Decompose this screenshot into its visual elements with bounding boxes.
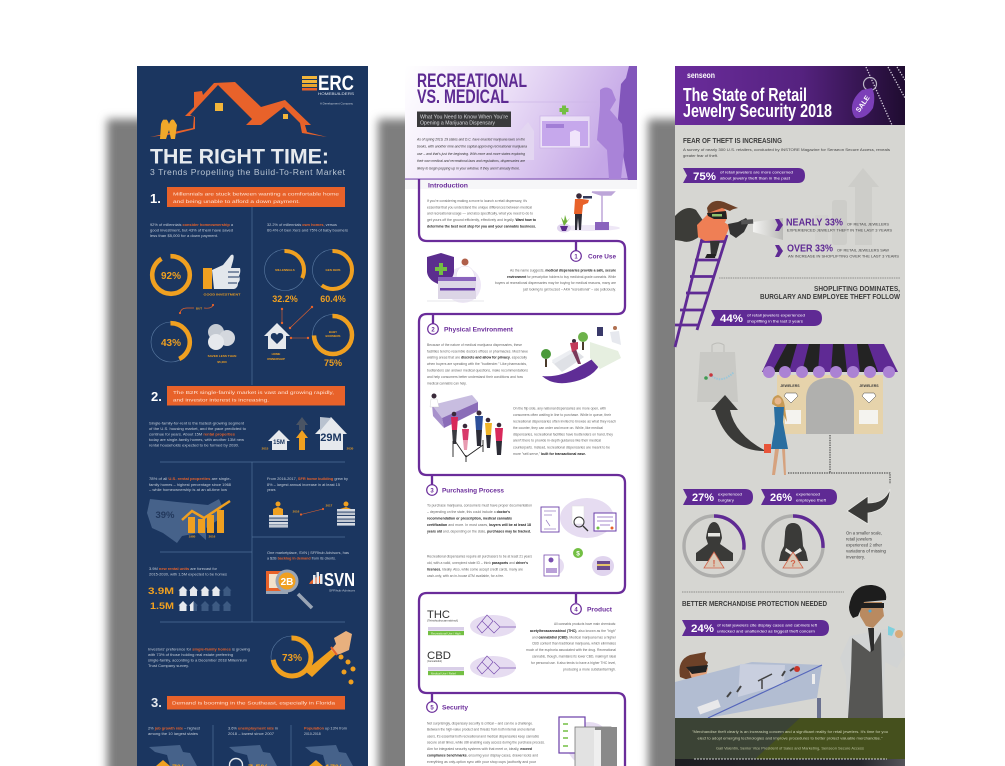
text: own homes: 32.2% of millennials own homes , versus [267,223,337,227]
section 3: purchasing process: Purchasing Process [442,488,504,494]
banner: 44% [711,310,822,326]
florida column: unemployment: 3.6% unemployment rate in [228,726,278,730]
section 2: physical environment: Because of the nature of medical marijuana dispensaries, these [427,343,522,347]
chart: employee ring [763,516,823,576]
chart: US map with rising bars [147,499,230,543]
section 2: physical environment: facilities tend to resemble doctors offices or pharmacies. Most have [427,350,528,354]
florida column: population [304,726,353,766]
section 2: physical environment: 2 [431,328,435,334]
icon: thumbs up [203,255,241,296]
dashed dividers [682,278,900,592]
chart: millennials donut [264,250,306,304]
icon: jewelry tag and beads [852,67,905,125]
text: single-family-for-rent: Single-family-for-rent is the fastest-growing segment [149,422,244,426]
section 2: physical environment: recreational dispensaries often invited to browse as what they reach [513,420,616,424]
section: introduction: get yours off the ground efficiently, effectively and legally. Want how to [427,218,536,222]
icon: coins [208,324,237,364]
section: introduction: If you're considering making a move to launch a retail dispensary, it's [427,199,527,203]
logo: SVN: SVN [324,570,355,590]
THC label: (Tetrahydrocannabinol) [427,620,458,622]
chart: gen xers donut: GEN XERS [326,268,341,272]
text: SFR home building [267,477,348,492]
chart: US map with rising bars: 39% [155,510,175,521]
icon: thumbs up: GOOD INVESTMENT [204,292,241,296]
icon: bricklayers: 2016 [293,510,300,514]
text: rental properties: family homes – highest percentage since 1968 [149,483,231,487]
intro italic text: use – and that's just the beginning. With more and more states exploring [417,152,525,156]
text: smaller scale note: inventory. [846,554,865,560]
florida column: job growth: 2% job growth rate – highest [148,726,200,730]
text: SFR home building: years [267,488,276,492]
section 2: physical environment [427,324,621,462]
banner: 27% burglary [683,489,753,505]
section 2: physical environment: medical cannabis can help. [427,382,467,386]
section 1: core use: As the name suggests, medical dispensaries provide a safe, secure [510,268,616,272]
section 1: core use: just looking to get buzzed – AKA "recreational" – use judiciously. [522,288,616,292]
CBD label: CBD [427,650,451,662]
section: introduction: and recreational usage — and also specifically, what you need to do to [427,212,533,216]
section 4: product: producing a more substantial high. [563,668,616,672]
header band: The State of Retail [683,84,807,105]
section 4: product: All cannabis products have main chemicals: [554,622,616,626]
CBD label: (Cannabidiol) [427,660,442,663]
illustration: queue at counter [430,394,503,462]
chart: baby boomers donut: BOOMERS [326,334,341,338]
stat: over 33%: OF RETAIL JEWELERS SAW [837,248,890,252]
section 1: core use: Core Use [588,254,616,260]
stat: nearly 33%: OF RETAIL JEWELERS [847,222,890,226]
section 2: physical environment: counterparts. Instead, recreational dispensaries are meant to be [513,446,610,450]
stat: nearly 33%: NEARLY 33% [786,218,843,228]
banner: 27% burglary: 27% [692,492,714,504]
heading: shoplifting dominates: BURGLARY AND EMPLOYEE THEFT FOLLOW [760,294,900,301]
text: homeownership intro: less than $5,000 for a down payment. [150,234,218,238]
text: single-family-for-rent: today are single-family homes, with another 13M new [149,438,245,442]
subtitle box: Opening a Marijuana Dispensary [420,120,496,126]
section 4: product: acetylhexacannabinol (THC), also known as the "high" [530,629,617,633]
icon: coins: $5,000 [217,360,227,364]
logo: ERC Homebuilders: HOMEBUILDERS [318,92,355,96]
section 3: purchasing process: licenses. Ideally. Also, while some accept credit cards, many are [427,568,523,572]
icon: jewelry tag and beads: SALE [855,94,872,114]
icon: magnifier over computer: 2B [281,577,293,588]
illustration: documents and magnifier [541,498,616,538]
CBD label: Medical Use / Relief [431,672,456,676]
title: VS. MEDICAL [417,87,509,108]
banner: 75%: 75% [693,171,716,183]
chart: baby boomers donut: BABY [329,330,337,334]
banner: 26% employee theft: employee theft [796,498,827,502]
CBD label [427,650,464,676]
heading: fear of theft: FEAR OF THEFT IS INCREASING [683,138,782,145]
chart: 15M to 29M houses: 15M [273,440,285,446]
logo: ERC Homebuilders: ERC [318,72,354,95]
chart: burglar ring: ! [712,558,716,568]
text: smaller scale note: experienced 2 other [846,542,883,548]
section 2 heading: The B2R single-family market is vast and growing rapidly, [173,390,334,395]
intro italic text: likely to begin popping up in your window, if they aren't already there. [417,166,520,170]
section 2 heading: 2. [151,389,162,404]
section 2: physical environment: waiting areas that are discrete and allow for privacy, especially [427,356,527,360]
section 3 heading: Demand is booming in the Southeast, especially in Florida [172,700,336,706]
banner: 27% burglary: burglary [718,498,734,502]
section 5: security: Between the high-value product and threats from both internal and external [427,728,535,732]
illustration: thief with flashlight [675,201,783,258]
banner: 75% [683,168,805,183]
section 4: product: and cannabidiol (CBD). Medical marijuana has a higher [532,636,617,640]
stat: nearly 33% [775,218,892,232]
illustration: silhouette and foliage [597,66,637,180]
text: rental units forecast: 2015-2030, with 1.5M expected to be homes [149,572,227,576]
text: investor preference: single-family, according to a December 2018 Millennium [148,658,247,662]
text: own homes [267,223,348,232]
section 3: purchasing process: certification and more. In most cases, buyers will be at least 18 [427,523,531,527]
icon: bricklayers: 2017 [326,504,333,508]
chart: US map with rising bars: 1980 [189,534,196,538]
chart: 15M to 29M houses: 2030 [347,446,354,450]
florida column: unemployment: 2018 – lowest since 2007 [228,732,274,736]
section 4: product: CBD content than traditional marijuana, which eliminates [532,642,616,646]
section 2 heading: and investor interest is increasing. [173,398,269,402]
text: rental properties [149,477,232,492]
text: rental properties: – while homeownership is at an all-time low [149,488,228,492]
panel: recreational vs medical infographic [405,66,637,766]
section 4: product: much of the euphoria associated with the drug. Recreational [526,648,616,652]
section 3: purchasing process: To purchase marijuana, consumers must have proper documentation [427,504,532,508]
panel: the right time infographic [137,66,368,766]
section 2: physical environment: when buyers are speaking with the "budtender." Like pharmacists, [427,362,527,366]
illustration: jeweler with diamond [840,585,905,718]
THC label [427,609,464,636]
illustration: shopping bag with jewelry [697,343,738,402]
section 3: purchasing process: Recreational dispensaries require all purchasers to be at least 21 years [427,554,532,558]
section 3: purchasing process: cash-only, with an in-house ATM available, for a fee. [427,574,504,578]
section 2: physical environment: On the flip side, any national dispensaries are more open, with [513,406,606,410]
chart: 3.9M and 1.5M house pictogram: 1.5M [150,601,174,612]
chart: gen xers donut [312,250,354,304]
banner: 24% [682,620,829,636]
section 5: security: users, it's essential both recreational and medical dispensaries keep cannabis [427,734,539,738]
section 1: core use: buyers at recreational dispensaries may be buying for medical reasons, many are [495,281,616,285]
chart: 15M to 29M houses: 2015 [262,446,269,450]
text: own homes: 60.4% of Gen Xers and 75% of baby boomers [267,228,348,232]
section 2: physical environment: more "self-serve," built for transactional ease. [513,452,586,456]
panel: state of retail jewelry security infographic [675,66,905,766]
text: smaller scale note: retail jewelers [846,536,872,542]
chart: millennials donut: MILLENNIALS [275,268,295,272]
background arrow chart [815,168,879,245]
chart: burglar ring [684,516,744,576]
florida column: unemployment [228,726,278,766]
section 4: product: for personal use. It also tends to have a higher THC level, [531,661,616,665]
section 4: product: 4 [574,608,578,614]
section 2: physical environment: Physical Environment [444,326,514,334]
section 2: physical environment: and help consumers better understand their conditions and how [427,375,523,379]
section 4: product: Product [587,606,613,614]
illustration: waiting room [541,326,621,383]
icon: home ownership: HOME [272,352,280,356]
chart: 73% donut with hand and coins: 73% [282,653,302,664]
chart: 92% donut [152,256,190,294]
title: THE RIGHT TIME: [150,146,329,168]
section 1: core use: environment for prescription holders to buy medicinal-grade cannabis. While [507,275,616,279]
section 3: purchasing process: recommendation or prescription, medical cannabis [427,516,512,520]
stat: nearly 33%: EXPERIENCED JEWELRY THEFT IN THE LAST 3 YEARS [787,228,892,232]
text: single-family-for-rent: continue for years. About 15M rental properties [149,432,235,436]
chart: millennials donut: 32.2% [272,294,298,304]
section 5: security: Not surprisingly, dispensary security is critical – and can be a challenge. [427,722,533,726]
text: rental units forecast: 3.9M new rental units are forecast for [149,567,218,571]
text: rental properties: 78% of all U.S. rental properties are single- [149,477,232,481]
intro italic text [416,138,527,170]
icon: medical shield and doctor [427,253,484,303]
text: single-family-for-rent: of the U.S. housing market, and the pace predicted to [149,427,246,431]
quote band: Gail Valentin, Senior Vice President of Sales and Marketing, Senseon Secure Access [716,746,864,750]
text: investor preference: with 73% of those holding real estate preferring [148,653,233,657]
chart: 43% donut [151,322,191,362]
section 3: purchasing process: old, with a valid, unexpired state ID – think passports and driver's [427,561,528,565]
section 2: physical environment: aren't there to provide in-depth guidance like their medical [513,438,601,442]
section 1: core use [427,251,616,303]
section 4: product: cannabis, though, maintains its lower CBD, making it ideal [532,654,616,658]
arrow: from bag to shopper [711,395,766,451]
subtitle box [417,112,511,127]
banner: 75%: of retail jewelers are more concerned [720,170,793,174]
divider lines [160,207,345,766]
section 1: core use: 1 [574,254,578,260]
chart: gen xers donut: 60.4% [320,294,346,304]
title [417,71,527,108]
illustration: jewelry store: JEWELERS [859,384,879,388]
text: single-family-for-rent: rental households expected to be formed by 2030. [149,444,239,448]
section 2: physical environment: the counter, they can order and move on. While, like medical [513,426,603,430]
footer strip [675,759,905,766]
section 3: purchasing process: – depending on the state, this could include a doctor's [427,510,510,514]
text: single-family-for-rent [149,422,246,448]
flow line connecting sections [419,179,625,766]
text: homeownership intro: 92% of millennials consider homeownership a [150,223,233,227]
chart: 15M to 29M houses: 29M [320,432,342,444]
text: SVN backlog [267,551,349,560]
section 3: purchasing process: 3 [430,488,434,494]
banner: 27% burglary: experienced [718,492,742,496]
chart: 15M to 29M houses [262,417,354,450]
section 5: security [427,702,617,766]
text: SFR home building: 8% – largest annual increase in at least 15 [267,483,340,487]
illustration: checklist and cabinet [559,717,617,766]
illustration: glass display case [675,662,822,718]
heading: better merchandise protection: BETTER MERCHANDISE PROTECTION NEEDED [682,601,827,608]
text: investor preference: Investors' preference for single-family homes is growing [148,648,250,652]
chart: US map with rising bars: 2016 [209,534,216,538]
heading: shoplifting dominates [760,286,900,301]
banner: 44%: shoplifting in the last 3 years [747,320,803,324]
text: smaller scale note [846,530,887,560]
subtitle box: What You Need to Know When You're [420,114,508,120]
section 2: physical environment: budtenders can answer medical questions, make recommendations [427,368,528,372]
illustration: storefront with plus sign [480,102,598,160]
icon: bricklayers [269,502,355,528]
chart: 3.9M and 1.5M house pictogram [148,586,232,612]
section 2: physical environment: dispensaries, recreational facilities have budtenders on hand, they [513,432,613,436]
section 1 heading: Millennials are stuck between wanting a comfortable home [173,192,340,196]
section 3: purchasing process [427,485,616,578]
title [150,146,346,177]
section: introduction [427,182,620,232]
chart: 92% donut: 92% [161,271,181,282]
heading: fear of theft: greater fear of theft. [683,153,718,158]
text: investor preference: Trust Company survey. [148,664,189,668]
header band [675,66,905,125]
heading: fear of theft: A survey of nearly 300 U.S. retailers, conducted by INSTORE Magazine for Senseon Secure Access, reveals [683,147,890,152]
florida column: job growth: among the 10 largest states [148,732,198,736]
section: introduction: determine the best next step for you and your cannabis business. [427,224,536,228]
florida column: population: 2010-2018 [304,732,321,736]
intro italic text: As of spring 2019, 29 states and D.C. have enacted marijuana laws on the [416,138,525,142]
icon: home ownership [264,306,313,361]
section 2: physical environment: consumers often waiting in line to purchase. While in queue, their [513,413,612,417]
quote band: elect to adopt emerging technologies and improve procedures to better protect valuable merchandise." [698,736,883,740]
section 5: security: Aim for integrated security systems with that meet or, ideally, exceed [427,747,532,751]
banner: 24%: 24% [691,623,714,635]
section: introduction: essential that you understand the unique differences between medical [427,206,532,210]
florida column: population: Population up 13% from [304,726,347,730]
stat: over 33%: AN INCREASE IN SHOPLIFTING OVER THE LAST 3 YEARS [788,254,899,258]
banner: 26% employee theft [761,489,837,505]
section 5: security: compliance benchmarks, ensuring your display cases, drawer locks and [427,754,538,758]
section 3: purchasing process: years old and, depending on the state, purchases may be tracked. [427,530,531,534]
illustration: ID, cash and card [544,548,614,576]
intro italic text: books, with another nine and the capital approving recreational marijuana [417,144,527,148]
chart: baby boomers donut: 75% [324,358,342,368]
chart: 3.9M and 1.5M house pictogram: 3.9M [148,586,174,597]
icon: home ownership: OWNERSHIP [267,357,285,361]
icon: coins: SAVED LESS THAN [208,354,237,358]
text: smaller scale note: variations of missing [846,548,887,554]
section 5: security: Security [442,704,468,712]
text: SVN backlog: a $2B backlog in demand from its clients. [267,556,336,560]
section 4: product [427,604,617,678]
section 1 heading [150,187,345,207]
section 1 heading: and being unable to afford a down payment. [173,199,300,204]
section 2 heading [151,386,345,406]
quote band [675,718,905,759]
title: 3 Trends Propelling the Build-To-Rent Market [150,167,346,177]
section 3 heading [151,695,345,710]
banner: 24%: of retail jewelers cite display cases and cabinets left [717,624,818,628]
chart: employee ring: ? [790,558,796,568]
arrow: curving back to note [847,489,890,524]
text: homeownership intro [150,223,233,238]
logo: ERC Homebuilders [302,72,355,106]
intro italic text: their own medical and recreational laws and regulations, dispensaries are [417,159,525,163]
text: homeownership intro: good investment, but 43% of them have saved [150,228,233,232]
molecule: THC [470,615,516,637]
illustration: shopper in blue dress [764,395,788,475]
florida column: job growth [148,726,200,766]
heading: fear of theft [683,138,890,158]
stat: over 33% [775,244,899,258]
section 3 heading: 3. [151,695,162,710]
banner: 26% employee theft: experienced [796,492,820,496]
header band: Jewelry Security 2018 [683,100,832,121]
title: RECREATIONAL [417,71,527,92]
icon: orange house roof [150,82,327,139]
arrow: but connector: BUT [196,306,202,310]
section 5: security: 5 [430,706,434,712]
THC label: Recreational Use / High [431,632,461,636]
section 5: security: secure at all times, while still enabling easy access during the purchase process. [427,740,545,744]
banner: 44%: 44% [720,313,743,325]
illustration: ladder [675,235,727,347]
logo: ERC Homebuilders: A Development Company [320,102,354,106]
arrow: but connector [179,304,214,314]
text: rental units forecast [149,567,227,576]
section: introduction: Introduction [428,182,468,190]
text: investor preference [148,648,250,668]
stat: over 33%: OVER 33% [787,244,833,254]
illustration: ID, cash and card: $ [576,550,580,558]
header band: senseon [687,71,715,80]
drop shadows behind the three sheets [107,119,688,766]
text: SVN backlog: One marketplace, SVN | SFRhub Advisors, has [267,551,349,555]
illustration: jewelry store [762,344,898,434]
molecule: CBD [470,656,516,678]
logo: SVN [309,570,356,592]
quote band: "Merchandise theft clearly is an increasing concern and a significant reality for retail jewelers. It's time for you [692,729,888,734]
section 5: security: everything as only-option sync with your shop cups (authority and your [427,760,537,764]
section 1 heading: 1. [150,191,161,206]
dotted connector [788,435,890,484]
banner: 26% employee theft: 26% [770,492,792,504]
illustration: masked thief peeking [679,652,708,680]
chart: 43% donut: 43% [161,338,181,349]
heading: shoplifting dominates: SHOPLIFTING DOMINATES, [814,286,900,293]
chart: baby boomers donut [312,314,354,368]
logo: SVN: SFRhub Advisors [329,588,356,592]
banner: 24%: unlocked and unattended as biggest theft concern [717,630,815,634]
illustration: jewelry store: JEWELERS [780,384,800,388]
illustration: woman with binoculars [557,192,620,232]
text: smaller scale note: On a smaller scale, [846,530,882,536]
banner: 44%: of retail jewelers experienced [747,314,805,318]
icon: magnifier over computer [266,571,312,608]
header background [405,66,637,189]
banner: 75%: about jewelry theft than in the past [720,176,791,180]
chart: 73% donut with hand and coins [271,631,356,684]
text: SFR home building: From 2016-2017, SFR home building grew by [267,477,348,481]
THC label: THC [427,609,450,621]
